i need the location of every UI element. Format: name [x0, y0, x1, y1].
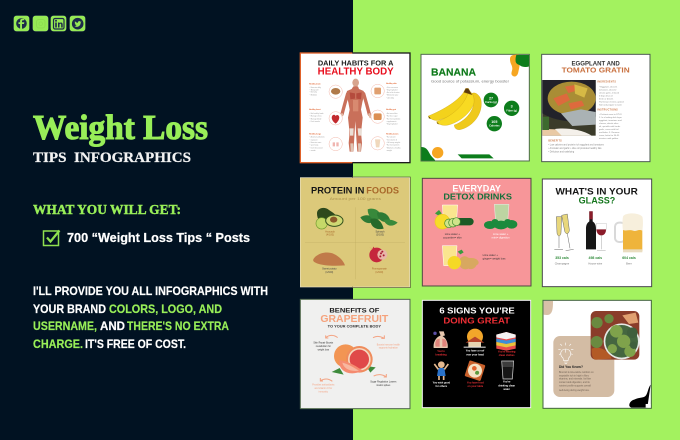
- icon: child: [434, 361, 448, 380]
- habit labels: • supplements: [386, 120, 397, 123]
- card: daily habits: DAILY HABITS FOR A: [318, 59, 394, 68]
- protein title: FOODS: [366, 185, 399, 195]
- food labels: (1/100): [375, 271, 383, 274]
- sign labels: You're: [503, 381, 511, 384]
- icon: instagram: [32, 16, 48, 32]
- gratin ingredients and instructions: INGREDIENTS: [597, 82, 616, 84]
- sign labels: on your table: [468, 385, 484, 388]
- habit labels: • Moisturize your: [386, 94, 399, 97]
- gratin ingredients and instructions: tomatoes, sliced 2: [599, 88, 617, 91]
- benefit labels: Skin Repair Boosts: [313, 342, 334, 345]
- food: sweet potato: [313, 253, 345, 266]
- did you know text: vitamins, and minerals. Its fiber: [559, 378, 591, 381]
- sign labels: water: [503, 388, 510, 391]
- benefit labels: metabolism for: [316, 345, 331, 348]
- muscle figure: [341, 79, 370, 152]
- gratin ingredients and instructions: • Low calories and protein rich eggplant and tomatoes: [548, 144, 605, 147]
- footer banner: [458, 154, 494, 158]
- gratin ingredients and instructions: cover, bake for 30-35: [599, 134, 620, 137]
- food labels: [322, 230, 387, 274]
- corner shapes bottom left: [421, 147, 443, 161]
- paragraph: USERNAME,: [33, 319, 97, 333]
- sign labels: You're: [437, 350, 445, 353]
- benefit labels: supports hydration: [379, 347, 399, 350]
- corner shape top left: [544, 301, 553, 315]
- card: detox drinks: DETOX DRINKS: [443, 191, 512, 201]
- nutrient labels: Fiber (g): [506, 108, 517, 112]
- drink values: House wine: [588, 261, 603, 265]
- food labels: (1/100): [325, 271, 333, 274]
- nutrient labels: [485, 96, 517, 128]
- gratin ingredients and instructions: • Delicious and satisfying: [548, 150, 575, 153]
- nutrient labels: 105: [491, 120, 497, 124]
- signs title: 6 SIGNS YOU'RE: [439, 306, 515, 316]
- broccoli photo: [591, 311, 640, 360]
- glass title: WHAT'S IN YOUR: [555, 187, 638, 197]
- sign labels: You wish good: [433, 381, 451, 384]
- paragraph: IT'S FREE OF COST.: [85, 337, 186, 351]
- gratin ingredients and instructions: • Eggplant, sliced 1: [599, 85, 618, 88]
- food labels: Avocado: [325, 230, 335, 233]
- icon: wine: [586, 211, 606, 251]
- habit circles: [329, 84, 384, 151]
- gratin ingredients and instructions: [548, 82, 624, 153]
- habit labels: Healthy bones: [386, 132, 398, 135]
- did you know text: [559, 371, 594, 392]
- drink labels: cucumber= skin: [443, 236, 462, 240]
- icon: roof: [464, 329, 486, 348]
- paragraph: [33, 284, 268, 351]
- paragraph: I'LL PROVIDE YOU ALL INFOGRAPHICS WITH: [33, 284, 268, 298]
- drink labels: ginger= weight loss: [483, 257, 506, 261]
- protein title: [311, 185, 399, 195]
- card: grapefruit: [300, 299, 410, 409]
- nutrient labels: Calories: [489, 124, 500, 128]
- food: pomegranate: [369, 247, 387, 262]
- icon: twitter: [70, 16, 86, 32]
- drink: ginger: [442, 246, 479, 269]
- sign labels: over your head: [466, 353, 484, 356]
- habit labels: • your lungs: [310, 145, 319, 147]
- card: 6 signs: DOING GREAT: [443, 315, 511, 325]
- gratin ingredients and instructions: oil, sprinkle with herbs: [599, 125, 620, 128]
- habit labels: • Meditate: [310, 93, 317, 96]
- arrows: [320, 335, 386, 381]
- gratin title: EGGPLANT AND: [571, 61, 620, 68]
- sign labels: clean clothes: [499, 354, 515, 357]
- habit labels: • Exercise more: [310, 142, 321, 144]
- food labels: Sweet potato: [322, 267, 337, 270]
- sign labels: You have a roof: [466, 350, 484, 353]
- bananas: [428, 88, 481, 130]
- benefit labels: insulin spikes: [376, 385, 391, 387]
- nutrient labels: 3: [511, 105, 513, 109]
- habit labels: • Stay hydrated: [386, 123, 397, 126]
- food: avocado: [316, 208, 343, 229]
- habit labels: Healthy brain: [309, 82, 321, 85]
- habit labels: • Lift heavy weights: [386, 141, 400, 144]
- habit labels: • Eat fatty: [310, 91, 317, 94]
- icon: clothes: [496, 332, 516, 351]
- grapefruit title: BENEFITS OF: [329, 308, 379, 315]
- gratin ingredients and instructions: cloves garlic, minced: [599, 91, 620, 94]
- habit labels: Healthy lungs: [309, 132, 321, 135]
- grapefruit fruit: [332, 344, 376, 375]
- background: dark left panel: [0, 0, 353, 440]
- did you know text: content aids digestion, and its: [559, 381, 591, 384]
- drink labels: mint= digestion: [492, 236, 510, 240]
- protein subtitle: Amount per 100 grams: [330, 196, 381, 201]
- gratin ingredients and instructions: garlic, cover with foil: [599, 128, 619, 131]
- list item: 700 “Weight Loss Tips “ Posts: [67, 230, 250, 245]
- habit labels: • Eat more protein: [386, 144, 399, 147]
- drink labels: [443, 232, 510, 261]
- icon: linkedin: [50, 16, 66, 32]
- habit labels: • Don't smoke: [310, 120, 320, 123]
- icon: light bulb: [558, 343, 573, 363]
- gratin photo: [542, 80, 596, 136]
- info panel: [553, 336, 614, 397]
- habit labels: Healthy gut: [386, 108, 396, 111]
- sign labels: [433, 350, 516, 391]
- paragraph: AND: [100, 319, 125, 333]
- card: grapefruit: TO YOUR COMPLETE BODY: [328, 325, 382, 329]
- did you know text: well-being during weight loss.: [559, 389, 590, 392]
- heading: what you will get: WHAT YOU WILL GET:: [33, 203, 181, 218]
- habit labels: • Eat more probiotic: [386, 117, 401, 120]
- subtitle: TIPS INFOGRAPHICS: [33, 150, 191, 166]
- food labels: (3/100): [376, 234, 384, 237]
- habit labels: • Eat calcium: [386, 136, 396, 139]
- icon: champagne: [554, 214, 574, 251]
- habit labels: • weight: [386, 149, 392, 152]
- icon: food plate: [464, 360, 485, 381]
- icon: facebook: [14, 16, 30, 32]
- habit labels: • Eat less sugar: [386, 115, 398, 118]
- habit labels: • Get vitamin D: [386, 138, 398, 141]
- habit labels: • Eat a lot of water: [386, 91, 400, 94]
- habit labels: • skin daily: [386, 97, 394, 99]
- paragraph: CHARGE.: [33, 337, 83, 351]
- icon: lungs: [433, 331, 448, 348]
- drink labels: Lime water +: [445, 232, 460, 236]
- food labels: Spinach: [375, 230, 385, 233]
- did you know text: Broccoli is low-calorie nutrition on: [559, 371, 594, 374]
- drink: mint: [484, 204, 517, 229]
- card: banana: [421, 54, 529, 161]
- paragraph: COLORS, LOGO, AND: [109, 302, 222, 316]
- card: eggplant gratin: TOMATO GRATIN: [562, 66, 630, 75]
- gratin ingredients and instructions: eggplant, tomatoes and: [599, 119, 622, 122]
- corner shapes top right: [510, 55, 529, 77]
- food labels: (4/100): [326, 234, 334, 237]
- benefit labels: [312, 342, 401, 393]
- habit labels: • Use sunscreen: [386, 87, 398, 89]
- gratin ingredients and instructions: Salt and pepper to taste: [599, 103, 623, 106]
- icon: checkbox: [44, 230, 60, 246]
- banana title: BANANA: [431, 68, 477, 79]
- habit labels: • Eat healthy foods: [310, 112, 324, 115]
- drink values: 353 cals: [555, 256, 569, 260]
- habit labels: • Manage stress: [310, 115, 322, 118]
- sign labels: for others: [436, 385, 448, 388]
- paragraph: THERE'S NO EXTRA: [127, 319, 229, 333]
- gratin ingredients and instructions: cheese, drizzle olive: [599, 122, 619, 125]
- habit labels: • smoke: [310, 150, 316, 152]
- benefit labels: Boosts immune health: [377, 343, 401, 346]
- card: grapefruit: GRAPEFRUIT: [320, 314, 389, 325]
- gratin ingredients and instructions: 3 tbsp olive oil: [599, 94, 613, 97]
- habit labels: • exposure: [310, 139, 318, 141]
- corner shape bottom right: [629, 385, 651, 408]
- drink: lemon and cucumber: [435, 205, 474, 229]
- habit labels: • Manage blood: [310, 118, 321, 120]
- drink labels: Lime water +: [493, 232, 509, 236]
- card: did you know: [543, 300, 651, 408]
- gratin ingredients and instructions: minutes until golden: [599, 137, 619, 140]
- sign labels: breathing: [435, 354, 447, 357]
- sign labels: You're wearing: [498, 350, 516, 353]
- gratin ingredients and instructions: • Aromatic and garlic • olive oil provides healthy fats: [548, 147, 602, 150]
- gratin ingredients and instructions: fresh or dried 1: [599, 97, 614, 100]
- detox title: EVERYDAY: [452, 183, 501, 193]
- gratin ingredients and instructions: 2. In a baking dish layer: [599, 116, 622, 119]
- card: eggplant gratin: [542, 54, 650, 162]
- banana subtitle: Good source of potassium, energy booster: [431, 80, 510, 84]
- drink values: 498 cals: [589, 256, 602, 260]
- did you know text: vegetable rich in high in fiber,: [559, 374, 590, 377]
- organ icons: [331, 88, 382, 147]
- gratin ingredients and instructions: INSTRUCTIONS: [597, 109, 618, 111]
- card: what's in your glass: [542, 179, 652, 287]
- habit labels: Healthy heart: [309, 108, 321, 111]
- card: 6 signs: [422, 300, 531, 408]
- habit labels: • Stay hydrated: [386, 88, 397, 91]
- did you know heading: Did You Know?: [559, 365, 583, 369]
- food: spinach: [360, 209, 398, 229]
- habit labels: • Eat more fiber: [386, 112, 398, 115]
- drink values: Beer: [626, 261, 632, 265]
- habit labels: Healthy skin: [386, 82, 397, 85]
- food labels: Pomegranate: [372, 267, 387, 270]
- benefit labels: immunity: [319, 390, 329, 393]
- card: detox drinks: [422, 178, 531, 286]
- paragraph: YOUR BRAND: [33, 302, 106, 316]
- drink values: Champagne: [555, 261, 570, 265]
- card: protein in foods: [300, 177, 410, 288]
- habit labels: [309, 82, 401, 152]
- gratin ingredients and instructions: • Preheat oven to 375°F: [599, 113, 623, 116]
- icon: beer: [615, 213, 643, 252]
- sign labels: drinking clean: [498, 384, 516, 387]
- drink labels: Lime water +: [483, 253, 498, 257]
- social icons: [14, 16, 86, 32]
- nutrient badges: [484, 93, 519, 131]
- sign labels: You have food: [467, 381, 484, 384]
- gratin ingredients and instructions: Parmesan cheese, grated: [599, 100, 624, 103]
- gratin ingredients and instructions: BENEFITS: [548, 140, 562, 142]
- benefit labels: and vitamin C for: [315, 387, 332, 390]
- card: daily habits: [300, 52, 411, 163]
- did you know text: nutrient profile supports overall: [559, 384, 591, 387]
- card: what's in your glass: GLASS?: [579, 196, 615, 206]
- habit labels: • Exercise daily: [310, 87, 321, 89]
- benefit labels: Sugar Regulation Lowers: [370, 381, 397, 384]
- nutrient labels: Carbs (g): [485, 100, 497, 104]
- habit labels: • Maintain a healthy: [386, 146, 401, 149]
- nutrient labels: 27: [489, 96, 493, 100]
- background: lime right panel: [353, 0, 680, 440]
- title: Weight Loss: [33, 108, 208, 147]
- card: daily habits: HEALTHY BODY: [318, 66, 394, 77]
- benefit labels: Provides antioxidants: [312, 384, 335, 387]
- habit labels: • Sleep well: [310, 89, 319, 91]
- protein title: PROTEIN IN: [311, 185, 364, 195]
- drink values: [555, 256, 636, 265]
- habit labels: • Avoid air pollutants: [310, 136, 325, 139]
- icon: water glass: [502, 361, 514, 379]
- drink values: 604 cals: [622, 256, 636, 260]
- gratin ingredients and instructions: and bake. 3. Remove: [599, 132, 620, 134]
- habit labels: • Don't be around: [310, 146, 323, 149]
- benefit labels: weight loss: [318, 348, 330, 351]
